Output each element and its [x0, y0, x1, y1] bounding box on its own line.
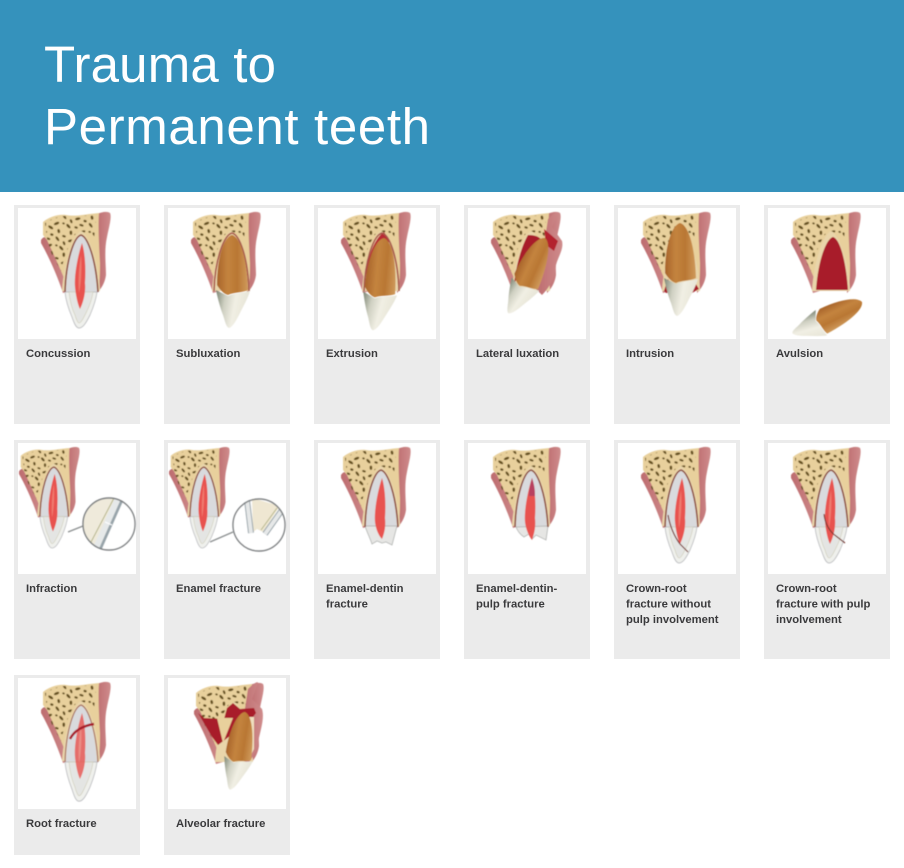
panel: Concussion: [14, 205, 140, 424]
icon: enamel-dentin-pulp fractured tooth: [491, 447, 561, 540]
panel: Root fracture: [14, 675, 140, 855]
icon: lateral luxation tooth: [491, 212, 562, 321]
label: Avulsion: Avulsion: [776, 348, 823, 360]
icon: root fractured tooth: [41, 682, 111, 801]
icon: infraction magnifier: [68, 495, 135, 550]
panel: Alveolar fracture: [164, 675, 290, 855]
icon: subluxation tooth: [191, 212, 261, 328]
icon: enamel fracture tooth: [169, 447, 230, 548]
label: Crown-root fracture with pulp involvement: Crown-root: [776, 583, 837, 595]
label: Root fracture: Root fracture: [26, 818, 97, 830]
panel: Extrusion: [314, 205, 440, 424]
icon: enamel-dentin fractured tooth: [341, 447, 411, 545]
title: Trauma to: [44, 36, 276, 93]
panel: Intrusion: [614, 205, 740, 424]
icon: concussion tooth: [41, 212, 111, 328]
label: Infraction: Infraction: [26, 583, 77, 595]
icon: avulsed tooth and empty socket: [788, 212, 868, 349]
label: Lateral luxation: Lateral luxation: [476, 348, 559, 360]
label: Alveolar fracture: Alveolar fracture: [176, 818, 265, 830]
label: Subluxation: Subluxation: [176, 348, 241, 360]
panel: Avulsion: [764, 205, 890, 424]
title: [44, 36, 430, 155]
icon: infraction tooth: [19, 447, 80, 548]
label: Crown-root fracture without pulp involvement: Crown-root: [626, 583, 687, 595]
panel: Lateral luxation: [464, 205, 590, 424]
icon: crown-root fracture tooth: [641, 447, 711, 563]
label: Enamel-dentin-pulp fracture: pulp fracture: [476, 598, 545, 610]
icon: enamel fracture magnifier: [210, 498, 285, 551]
label: Enamel-dentin-pulp fracture: Enamel-dentin-: [476, 583, 558, 595]
label: Enamel-dentin fracture: fracture: [326, 598, 368, 610]
label: Intrusion: Intrusion: [626, 348, 674, 360]
panel: Infraction: [14, 440, 140, 659]
panel: Enamel-dentin-pulp fracture: [464, 440, 590, 659]
label: Crown-root fracture with pulp involvement: involvement: [776, 614, 842, 626]
label: Crown-root fracture with pulp involvement: fracture with pulp: [776, 598, 871, 610]
header banner: [0, 0, 904, 192]
label: Enamel fracture: Enamel fracture: [176, 583, 261, 595]
label: Enamel-dentin fracture: Enamel-dentin: [326, 583, 404, 595]
panel: Enamel fracture: [164, 440, 290, 659]
panel: Enamel-dentin fracture: [314, 440, 440, 659]
panel: Subluxation: [164, 205, 290, 424]
label: Concussion: Concussion: [26, 348, 91, 360]
title: Permanent teeth: [44, 98, 430, 155]
label: Extrusion: Extrusion: [326, 348, 378, 360]
icon: crown-root fracture with pulp tooth: [791, 447, 861, 563]
icon: extrusion tooth: [341, 212, 411, 332]
panel: Crown-root fracture with pulp involvement: [764, 440, 890, 659]
icon: intrusion tooth: [641, 212, 711, 316]
icon: alveolar fractured tooth: [194, 682, 264, 792]
label: Crown-root fracture without pulp involvement: fracture without: [626, 598, 711, 610]
panel: Crown-root fracture without pulp involvement: [614, 440, 740, 659]
label: Crown-root fracture without pulp involvement: pulp involvement: [626, 614, 719, 626]
